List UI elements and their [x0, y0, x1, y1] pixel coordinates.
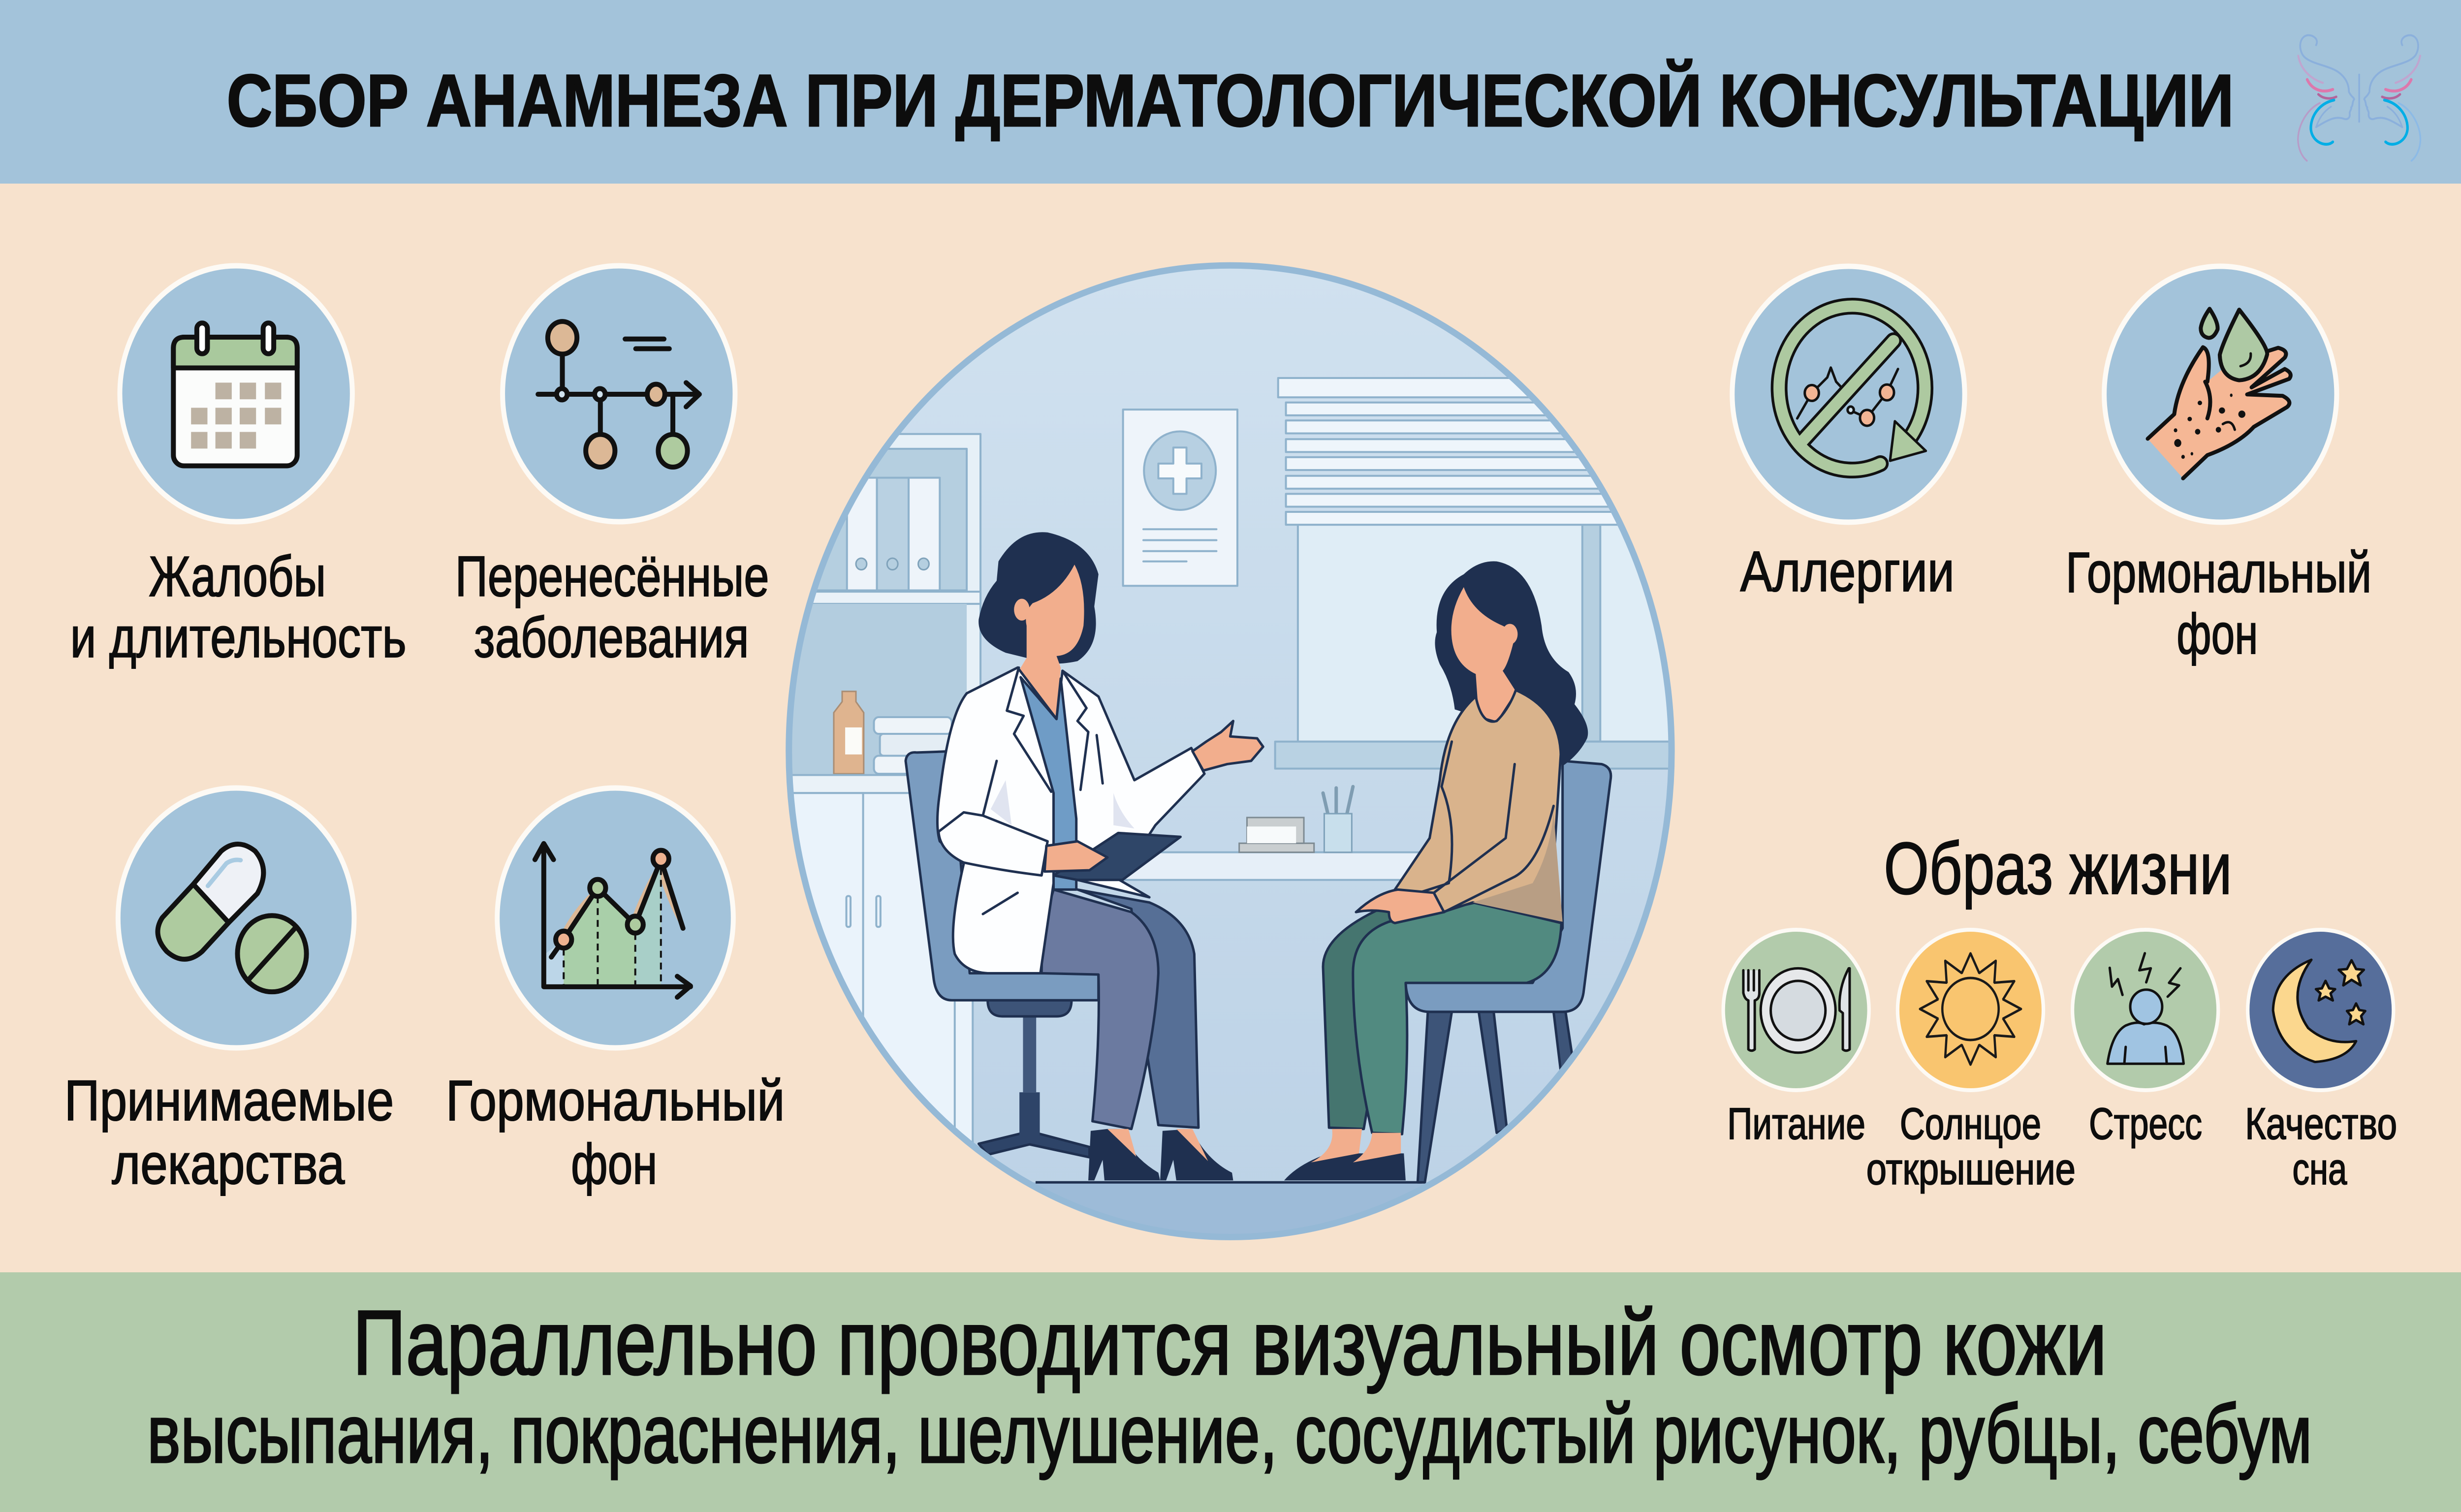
label: medication	[64, 1069, 394, 1196]
icon: medication pills	[118, 788, 354, 1048]
label: complaints	[70, 545, 407, 669]
title: СБОР АНАМНЕЗА ПРИ ДЕРМАТОЛОГИЧЕСКОЙ КОНСУЛЬТАЦИИ	[227, 59, 2234, 142]
patient chair	[1406, 761, 1611, 1182]
label: complaints: Жалобы	[149, 545, 326, 608]
circle badge	[1732, 266, 1965, 522]
central illustration: consultation scene	[760, 265, 1718, 1260]
label: complaints: и длительность	[70, 606, 407, 669]
label: hormones right: фон	[2177, 602, 2258, 666]
patient face and neck	[1451, 587, 1516, 721]
clipboard	[1053, 833, 1180, 880]
icon: past illness timeline	[503, 266, 735, 522]
footer headline: Параллельно проводится визуальный осмотр кожи	[353, 1291, 2107, 1394]
nutrition badge	[1723, 930, 1869, 1090]
scene circle ring	[789, 265, 1672, 1237]
doctor hair	[978, 532, 1099, 664]
label: nutrition: Питание	[1727, 1099, 1865, 1149]
patient figure	[1284, 561, 1588, 1180]
label: hormones left: фон	[571, 1133, 657, 1196]
label: hormones right	[2066, 541, 2371, 666]
doctor shoes	[1088, 1129, 1160, 1180]
sun badge	[1897, 930, 2044, 1090]
icon: nutrition	[1723, 930, 1869, 1090]
circle badge	[503, 266, 735, 522]
icon: stress	[2073, 930, 2218, 1090]
label: sun exposure	[1866, 1099, 2076, 1194]
header band	[0, 0, 2461, 184]
stress badge	[2073, 930, 2218, 1090]
doctor trousers	[1077, 889, 1199, 1128]
label: past illnesses: заболевания	[474, 606, 749, 669]
heading: lifestyle: Образ жизни	[1884, 827, 2232, 910]
desk with items	[1113, 787, 1425, 880]
patient hands	[1356, 889, 1444, 923]
icon: allergy prohibition	[1732, 266, 1965, 522]
floor	[1034, 1182, 1427, 1234]
icon: complaints calendar	[120, 266, 352, 522]
sleep badge	[2248, 930, 2394, 1090]
label: hormones left	[446, 1069, 785, 1196]
left shelf unit	[792, 433, 981, 1143]
label: stress: Стресс	[2089, 1099, 2202, 1149]
icon: sun exposure	[1897, 930, 2044, 1090]
label: medication: Принимаемые	[64, 1069, 394, 1133]
patient hair	[1435, 561, 1588, 766]
label: medication: лекарства	[112, 1133, 345, 1196]
label: allergies: Аллергии	[1740, 540, 1955, 603]
label: sun exposure: Солнцое	[1900, 1099, 2041, 1149]
doctor scrubs	[1021, 677, 1076, 889]
label: sun exposure: открышение	[1866, 1144, 2076, 1194]
icon: sleep quality	[2248, 930, 2394, 1090]
label: past illnesses: Перенесённые	[455, 545, 769, 608]
patient sweater	[1395, 690, 1563, 923]
footer band	[0, 1272, 2461, 1512]
label: hormones left: Гормональный	[446, 1069, 785, 1133]
doctor lapels	[983, 667, 1103, 914]
circle badge	[2104, 266, 2336, 522]
icon: hormone chart	[497, 788, 733, 1048]
label: sleep quality	[2245, 1099, 2397, 1194]
circle badge	[497, 788, 733, 1048]
doctor figure	[937, 532, 1263, 1180]
doctor hands	[1044, 841, 1107, 872]
scene circle background	[789, 265, 1672, 1237]
icon: hand with rash and drops	[2104, 266, 2336, 522]
label: past illnesses	[455, 545, 769, 669]
circle badge	[118, 788, 354, 1048]
doctor coat	[937, 667, 1204, 973]
doctor face and neck	[1019, 565, 1084, 719]
label: hormones right: Гормональный	[2066, 541, 2371, 604]
label: sleep quality: сна	[2293, 1144, 2347, 1194]
doctor sleeve	[939, 813, 1047, 876]
label: sleep quality: Качество	[2245, 1099, 2397, 1149]
window and blinds	[1275, 378, 1682, 769]
circle badge	[120, 266, 352, 522]
wall poster	[1123, 410, 1237, 586]
logo: butterfly faces	[2298, 35, 2421, 161]
patient shoes	[1284, 1152, 1406, 1180]
patient trousers	[1323, 903, 1395, 1129]
doctor chair	[906, 751, 1099, 1157]
